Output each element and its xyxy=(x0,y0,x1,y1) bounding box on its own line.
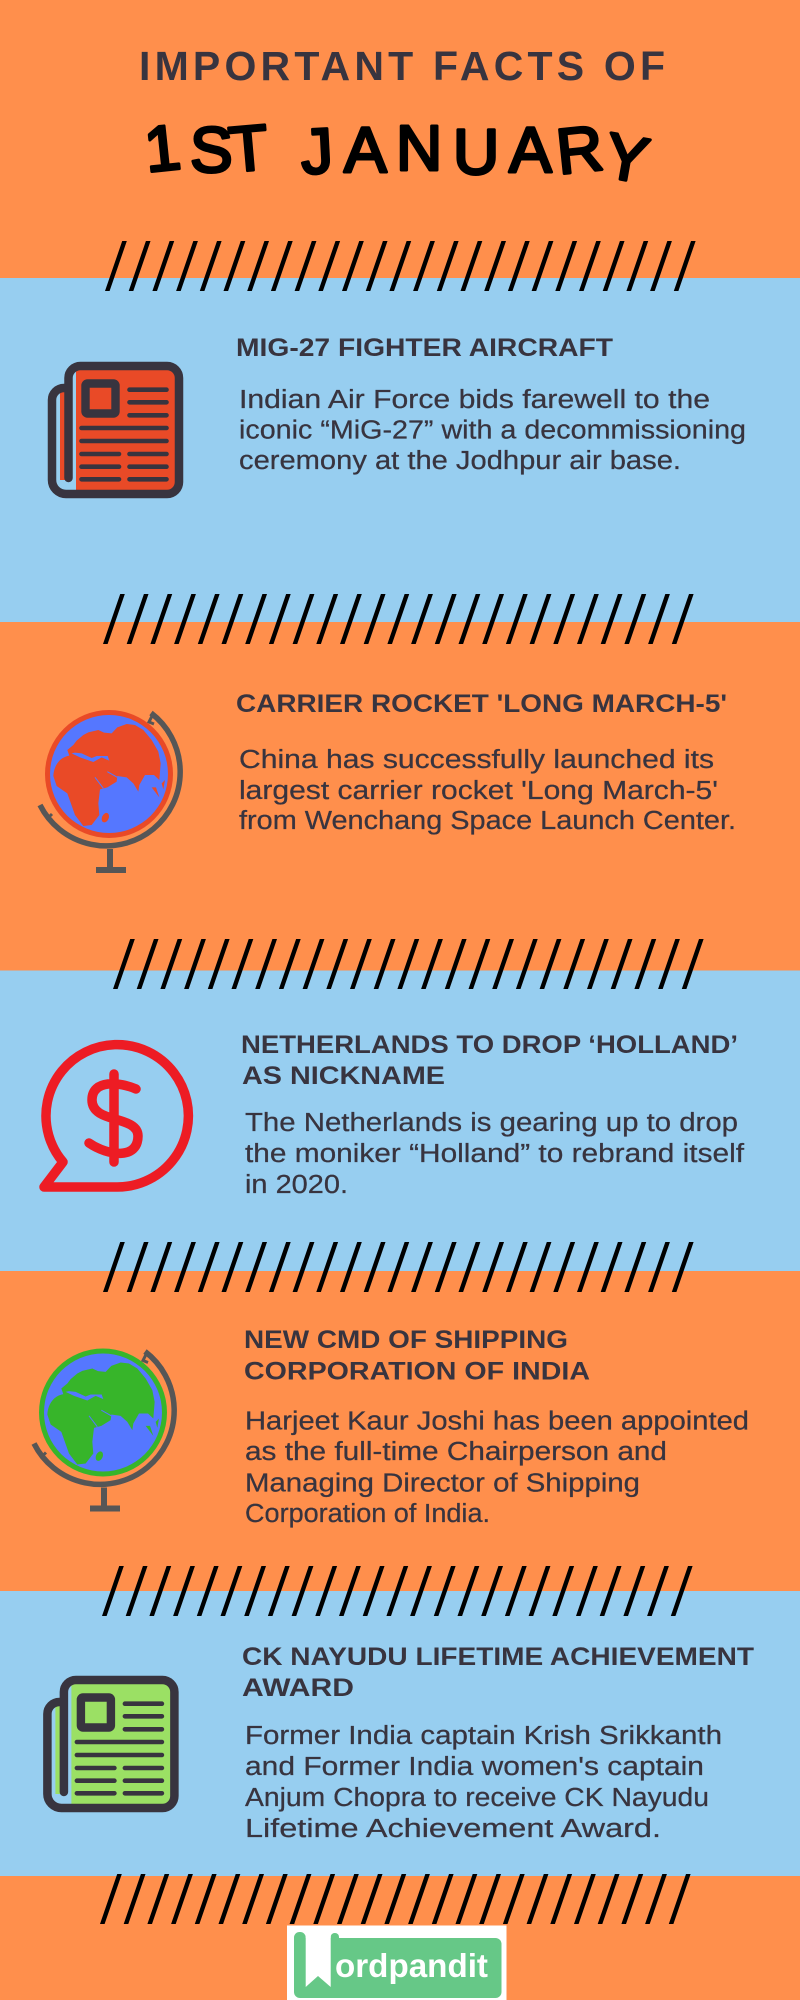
text block: MiG-27 description: ceremony at the Jodhpur air base. xyxy=(239,447,681,475)
panel: header xyxy=(0,0,800,278)
text block: CK Nayudu description: Lifetime Achievement Award. xyxy=(245,1815,661,1843)
text block: Netherlands description: in 2020. xyxy=(245,1171,348,1199)
text block: MiG-27 description xyxy=(239,386,746,475)
text block: MiG-27 description: iconic “MiG-27” with a decommissioning xyxy=(239,416,746,444)
text block: CK Nayudu description: Former India captain Krish Srikkanth xyxy=(245,1722,722,1750)
text block: new CMD description: Corporation of India. xyxy=(245,1500,490,1528)
logo: Wordpandit xyxy=(287,1926,506,2000)
icon: green globe xyxy=(34,1348,174,1508)
text block: new CMD description: Harjeet Kaur Joshi has been appointed xyxy=(245,1408,749,1436)
text block: CK Nayudu description xyxy=(245,1722,722,1843)
logo: Wordpandit: ordpandit xyxy=(335,1947,488,1984)
text block: new CMD description: Managing Director of Shipping xyxy=(245,1470,640,1498)
text block: new CMD description xyxy=(245,1408,749,1528)
text block: MiG-27 description: Indian Air Force bids farewell to the xyxy=(239,386,710,414)
heading: CK Nayudu: CK NAYUDU LIFETIME ACHIEVEMENT xyxy=(242,1643,754,1671)
panel: new CMD of Shipping Corporation xyxy=(0,1271,800,1591)
panel: CK Nayudu award xyxy=(0,1591,800,1876)
heading: carrier rocket: CARRIER ROCKET 'LONG MARCH-5' xyxy=(236,690,727,718)
text block: carrier rocket description: largest carrier rocket 'Long March-5' xyxy=(239,777,718,805)
icon: red globe xyxy=(40,710,180,870)
text block: Netherlands description xyxy=(245,1109,745,1199)
panel: carrier rocket Long March-5 xyxy=(0,622,800,971)
heading: MiG-27 fighter aircraft: MIG-27 FIGHTER AIRCRAFT xyxy=(236,334,613,362)
heading: Netherlands: NETHERLANDS TO DROP ‘HOLLAND’ xyxy=(241,1031,738,1059)
text block: Netherlands description: The Netherlands is gearing up to drop xyxy=(245,1109,738,1137)
title: important facts of: IMPORTANT FACTS OF xyxy=(139,43,665,89)
text block: carrier rocket description: China has successfully launched its xyxy=(239,746,714,774)
text block: Netherlands description: the moniker “Holland” to rebrand itself xyxy=(245,1140,745,1168)
heading: CK Nayudu xyxy=(242,1643,754,1702)
icon: dollar speech bubble xyxy=(44,1045,188,1187)
icon: green newspaper xyxy=(47,1680,174,1808)
panel: Netherlands drop Holland xyxy=(0,970,800,1272)
heading: CK Nayudu: AWARD xyxy=(242,1674,354,1702)
icon: red newspaper xyxy=(52,366,179,494)
text block: carrier rocket description xyxy=(239,746,736,835)
heading: Netherlands xyxy=(241,1031,738,1090)
heading: new CMD: NEW CMD OF SHIPPING xyxy=(244,1326,568,1354)
panel: MiG-27 fighter aircraft xyxy=(0,278,800,622)
text block: carrier rocket description: from Wenchang Space Launch Center. xyxy=(239,807,736,835)
heading: new CMD xyxy=(244,1326,590,1386)
title: 1st january: 1ST JANUARY xyxy=(141,111,654,197)
panel: footer xyxy=(0,1876,800,2000)
text block: new CMD description: as the full-time Chairperson and xyxy=(245,1438,667,1466)
heading: new CMD: CORPORATION OF INDIA xyxy=(244,1358,590,1386)
heading: Netherlands: AS NICKNAME xyxy=(242,1062,445,1090)
text block: CK Nayudu description: Anjum Chopra to receive CK Nayudu xyxy=(245,1784,709,1812)
text block: CK Nayudu description: and Former India women's captain xyxy=(245,1753,704,1781)
